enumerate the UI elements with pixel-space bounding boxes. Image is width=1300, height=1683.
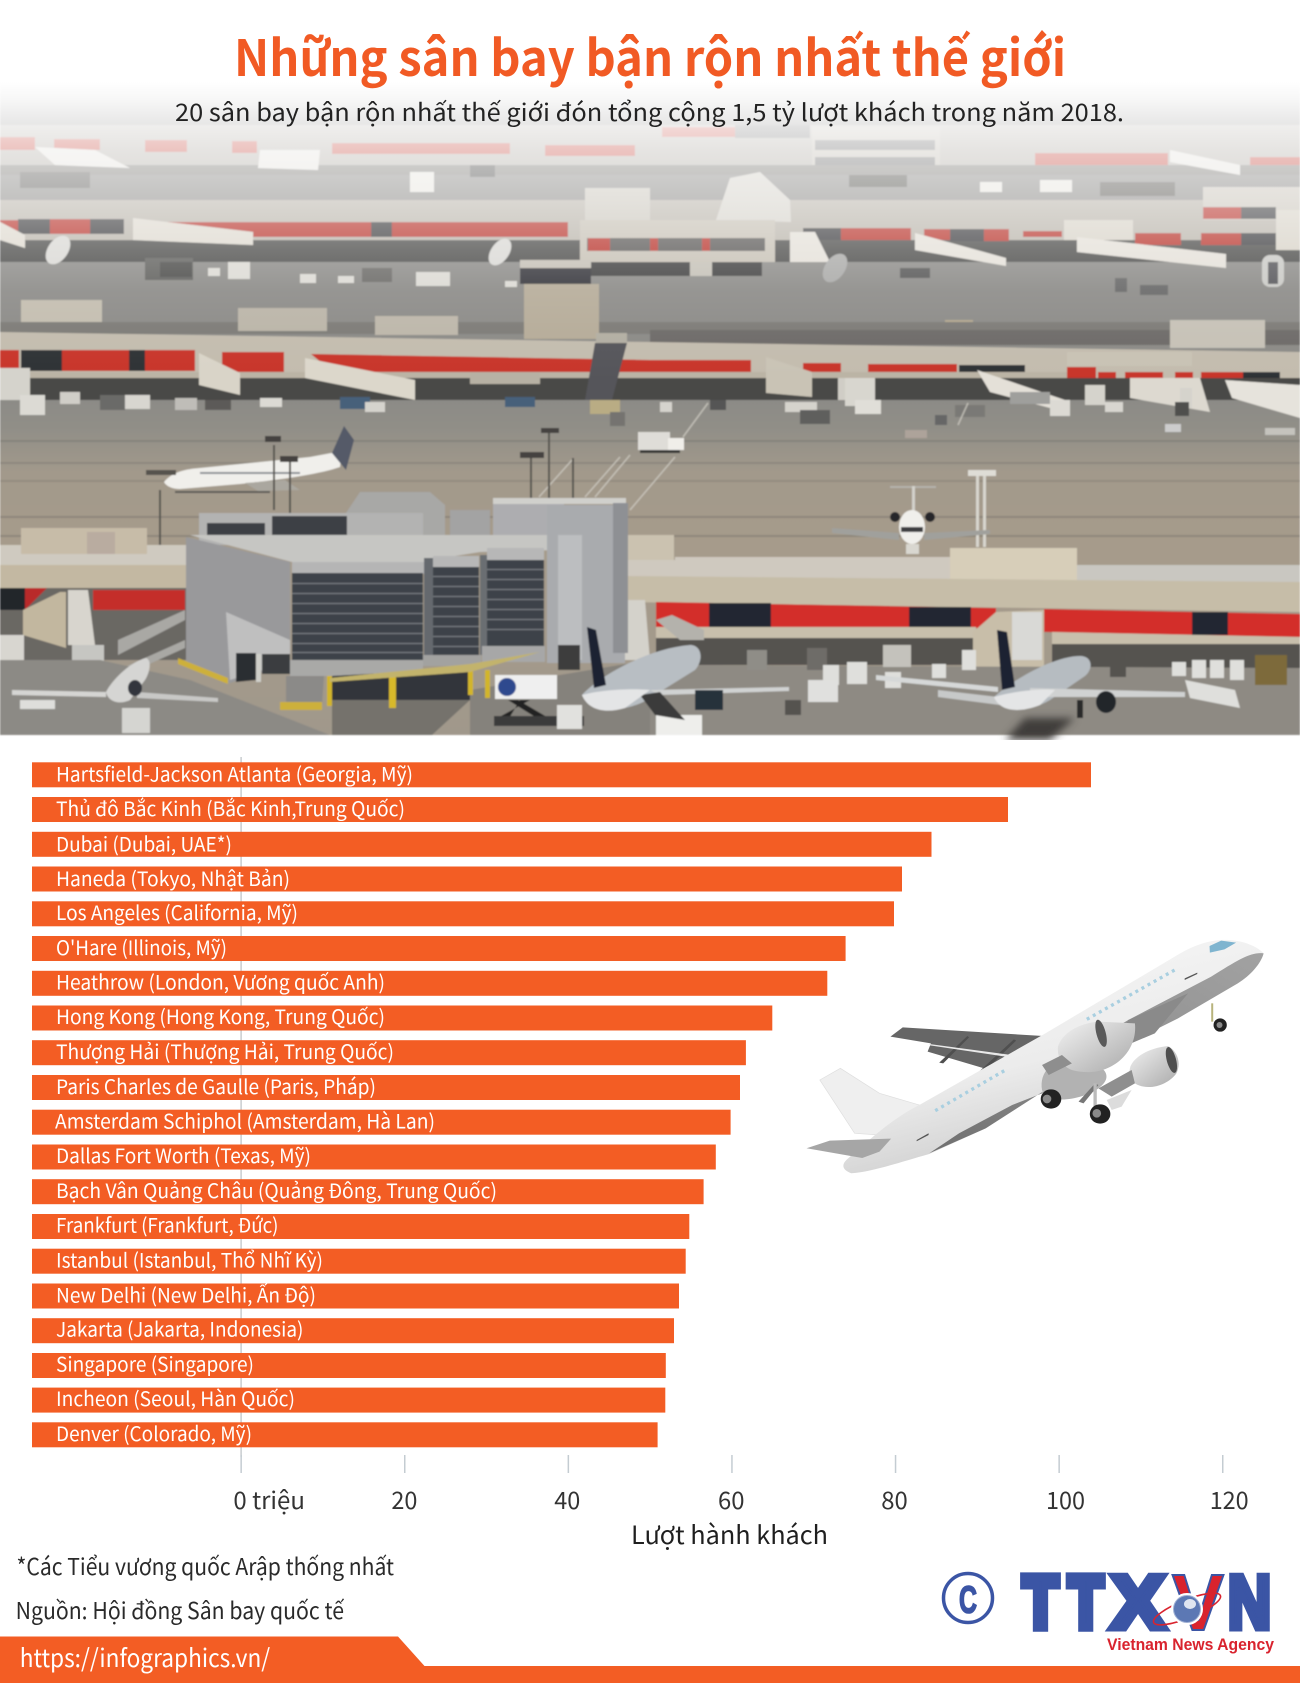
bar: Istanbul [32,1244,686,1274]
bar: Singapore: Singapore (Singapore) [56,1348,254,1378]
bar: Amsterdam: Amsterdam Schiphol (Amsterdam, Hà Lan) [55,1106,435,1134]
x axis ticks and labels: 100 [1046,1481,1085,1516]
bar: Paris [32,1071,740,1100]
fuselage [843,940,1264,1173]
horizontal stabiliser [807,1139,891,1158]
bar: Jakarta [32,1314,674,1343]
photo: airport terminal aerial view [0,78,1300,740]
near terminal left [0,528,190,697]
mid tarmac vehicles [20,165,1175,196]
x axis ticks and labels: 120 [1210,1481,1249,1516]
far terminal row [0,125,1300,187]
jet shadow [1005,718,1075,740]
bar: Hong Kong: Hong Kong (Hong Kong, Trung Quốc) [56,1001,385,1030]
bar: Jakarta: Jakarta (Jakarta, Indonesia) [56,1314,304,1342]
lower apron [0,660,1300,735]
bar: Heathrow: Heathrow (London, Vương quốc Anh) [56,966,385,996]
logo: copyright mark [944,1574,992,1622]
title: Những sân bay bận rộn nhất thế giới [234,19,1066,91]
footnote: *Các Tiểu vương quốc Arập thống nhất [16,1548,394,1582]
vehicles on second apron [145,258,1168,295]
x axis ticks and labels: 60 [718,1481,744,1516]
bar chart: busiest airports [32,757,1091,1457]
belly highlight under wing [1112,993,1188,1052]
logo: TTXVN: V [1172,1558,1224,1647]
second terminal row [0,172,1300,276]
door marks [917,973,1197,1141]
bar: Beijing [32,793,1008,822]
bar: Amsterdam [32,1106,731,1135]
engine: near [1058,1022,1135,1072]
bar: Guangzhou [32,1175,704,1204]
bar: O'Hare: O'Hare (Illinois, Mỹ) [56,932,227,961]
third terminal wall with red band [0,332,1300,418]
logo: TTXVN [1023,1558,1271,1647]
bar: Dubai [32,828,932,858]
vehicles row at gates [20,392,1295,438]
bar: Haneda: Haneda (Tokyo, Nhật Bản) [56,863,290,892]
parked US Airways jets [12,627,1185,740]
footer band [0,1636,1300,1683]
bar: Denver: Denver (Colorado, Mỹ) [56,1418,252,1447]
bar: Guangzhou: Bạch Vân Quảng Châu (Quảng Đông, Trung Quốc) [56,1175,497,1204]
website url: https://infographics.vn/ [20,1639,270,1675]
x axis ticks and labels: 80 [881,1481,908,1516]
bar: Paris: Paris Charles de Gaulle (Paris, Pháp) [56,1071,376,1100]
bar: Haneda [32,863,902,892]
logo: TTXVN: T [1068,1562,1103,1643]
bar: Singapore [32,1348,666,1378]
light poles [146,428,996,552]
icon: airplane taking off [807,940,1264,1173]
landing gear [1041,1003,1227,1124]
cockpit windows [1210,941,1236,953]
bar: New Delhi [32,1280,679,1308]
bar: Shanghai: Thượng Hải (Thượng Hải, Trung Quốc) [56,1036,394,1065]
bar: Dubai: Dubai (Dubai, UAE*) [56,828,232,858]
white service truck [638,432,684,453]
cabin windows [935,970,1175,1111]
x axis ticks and labels [233,1455,1249,1516]
bar: New Delhi: New Delhi (New Delhi, Ấn Độ) [56,1280,316,1308]
x axis ticks and labels: 20 [391,1481,417,1516]
bar: Los Angeles [32,897,894,926]
logo: copyright mark: C [959,1580,977,1622]
bar: Atlanta [32,758,1091,788]
bar: Istanbul: Istanbul (Istanbul, Thổ Nhĩ Kỳ) [56,1244,323,1274]
fuselage belly shading [929,953,1264,1153]
bar: O'Hare [32,932,846,961]
tower and dark staircase [520,260,627,400]
bar: Dallas: Dallas Fort Worth (Texas, Mỹ) [56,1140,311,1169]
bar: Incheon: Incheon (Seoul, Hàn Quốc) [56,1383,295,1412]
engine: far [1129,1046,1179,1087]
vertical tail [820,1068,919,1135]
bar: Heathrow [32,966,827,996]
bar: Frankfurt [32,1210,689,1239]
source note: Nguồn: Hội đồng Sân bay quốc tế [16,1592,344,1626]
subtitle: 20 sân bay bận rộn nhất thế giới đón tổng cộng 1,5 tỷ lượt khách trong năm 2018. [175,93,1124,128]
x axis ticks and labels: 40 [554,1481,580,1516]
bar: Shanghai [32,1036,746,1065]
small aircraft at second row [41,231,1284,287]
logo: TTXVN: X [1111,1560,1165,1644]
bar: Beijing: Thủ đô Bắc Kinh (Bắc Kinh,Trung Quốc) [56,793,405,822]
central grey terminal building [178,492,628,735]
logo: TTXVN: T [1023,1562,1058,1643]
bar: Dallas [32,1140,716,1170]
wing root [1042,1059,1107,1099]
Service truck with sign [494,675,702,735]
rear-view jet [832,486,990,554]
tarmac taxi markings and shading [0,403,1300,537]
regional jet taxiing [164,426,354,493]
bar: Hong Kong [32,1001,772,1030]
far wing [890,1027,1054,1083]
near terminal right [625,535,1300,670]
bar: Atlanta: Hartsfield-Jackson Atlanta (Georgia, Mỹ) [56,758,413,788]
x axis ticks and labels: 0 triệu [233,1481,305,1516]
parked service vehicles [747,645,1287,715]
logo: TTXVN: N [1228,1560,1271,1644]
bar: Incheon [32,1383,665,1413]
bar: Los Angeles: Los Angeles (California, Mỹ) [56,897,298,926]
logo: Vietnam News Agency: Vietnam News Agency [1107,1635,1274,1654]
bar: Denver [32,1418,658,1447]
third row service boxes [0,300,1300,348]
central rotunda building [585,188,650,220]
top haze overlay [0,78,1300,478]
axis title: Lượt hành khách [631,1516,828,1552]
bar: Frankfurt: Frankfurt (Frankfurt, Đức) [56,1210,278,1238]
